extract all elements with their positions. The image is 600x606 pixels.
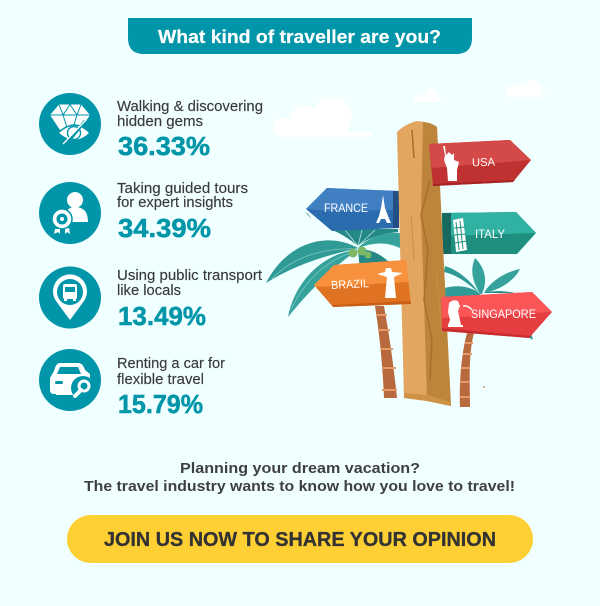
icon: person with badge <box>39 182 101 244</box>
title banner: What kind of traveller are you? <box>158 27 441 47</box>
cloud small middle <box>414 88 445 102</box>
label: like locals <box>117 283 181 299</box>
illustration: signpost <box>266 80 552 407</box>
percentage: 15.79% <box>118 389 203 419</box>
icon: Statue of Liberty <box>443 146 459 181</box>
label: Taking guided tours <box>117 181 248 197</box>
cloud large <box>273 97 373 137</box>
label: Walking & discovering <box>117 99 263 115</box>
sign: France: FRANCE <box>324 203 368 215</box>
icon: diamond and eye <box>39 93 101 155</box>
signpost pole <box>397 121 451 406</box>
sign: France <box>305 188 399 231</box>
percentage: 13.49% <box>118 301 206 331</box>
label: Renting a car for <box>117 356 225 372</box>
call to action button <box>67 515 533 563</box>
percentage: 36.33% <box>118 131 210 161</box>
percentage: 34.39% <box>118 213 211 243</box>
icon: bus in map pin <box>39 266 101 328</box>
label: flexible travel <box>117 372 204 388</box>
left palm tree <box>266 229 400 398</box>
sign: USA: USA <box>472 157 496 169</box>
sign: Singapore: SINGAPORE <box>471 309 536 321</box>
closing text: Planning your dream vacation? <box>180 461 420 477</box>
sign: Italy <box>442 212 536 254</box>
item: renting a car <box>39 349 225 419</box>
icon: car and key <box>39 349 101 411</box>
sign: Singapore <box>441 292 552 338</box>
closing text <box>84 461 515 495</box>
sign: USA <box>429 140 531 186</box>
right palm tree <box>444 258 533 407</box>
label: hidden gems <box>117 114 203 130</box>
icon: Eiffel tower <box>376 195 391 223</box>
icon: leaning tower of Pisa <box>453 218 467 252</box>
call to action button: JOIN US NOW TO SHARE YOUR OPINION <box>104 529 496 551</box>
sign: Brazil: BRAZIL <box>331 278 370 292</box>
cloud small right <box>507 80 547 97</box>
item: walking <box>39 93 263 161</box>
item: guided tours <box>39 181 248 244</box>
icon: Merlion <box>448 300 472 327</box>
title banner <box>128 18 472 54</box>
sign: Italy: ITALY <box>475 229 505 241</box>
item: public transport <box>39 266 262 331</box>
label: Using public transport <box>117 268 262 284</box>
icon: Christ the Redeemer <box>377 268 403 298</box>
sand speck <box>483 386 485 388</box>
label: for expert insights <box>117 195 233 211</box>
closing text: The travel industry wants to know how you love to travel! <box>84 479 515 495</box>
sign: Brazil <box>314 260 411 307</box>
